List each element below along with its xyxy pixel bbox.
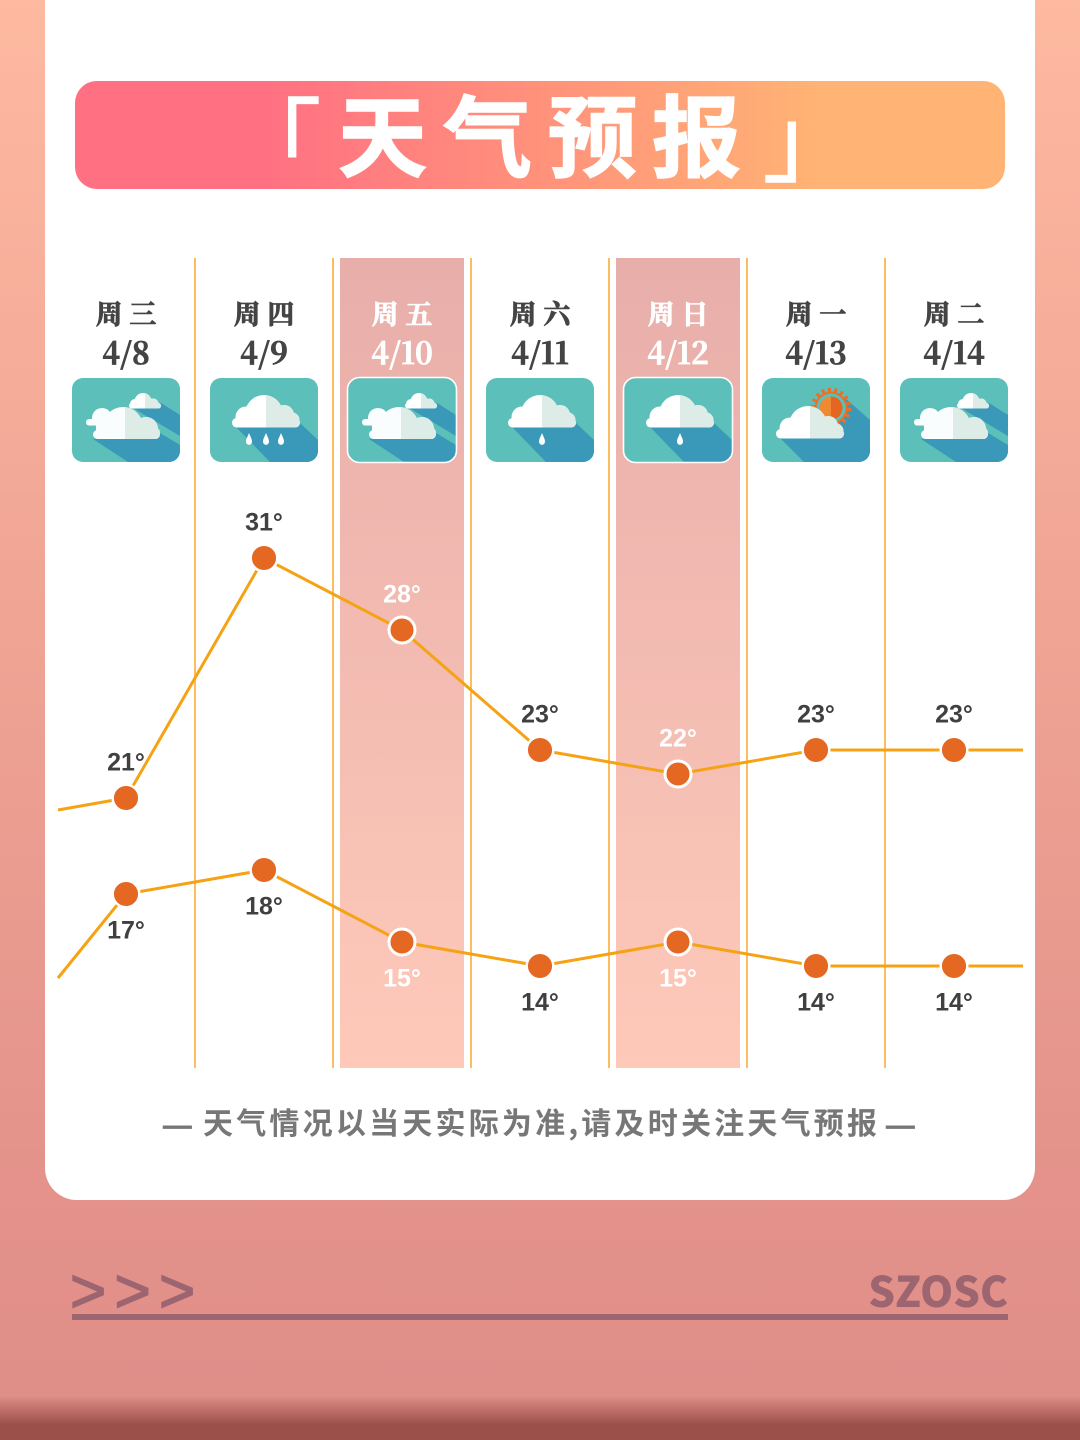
high temperature labels — [107, 508, 973, 776]
high temperature labels: 21° — [107, 748, 145, 776]
day: Mon 4/13: 4/13 — [785, 329, 847, 373]
highlighted column: Sunday — [616, 258, 740, 1068]
title closing bracket: 」 — [763, 68, 855, 201]
icon: sun and cloud, Mon — [762, 378, 870, 462]
high temperature line — [58, 545, 1023, 811]
day: Fri 4/10 — [371, 293, 433, 373]
low temperature labels: 14° — [521, 988, 559, 1016]
footnote: 天气情况以当天实际为准,请及时关注天气预报 — [203, 1099, 877, 1143]
low temperature labels: 14° — [797, 988, 835, 1016]
icon: cloudy, Wed — [72, 378, 180, 462]
icon: cloudy, Tue — [900, 378, 1008, 462]
low temperature labels: 15° — [383, 964, 421, 992]
title opening bracket: 「 — [229, 69, 321, 202]
high temperature labels: 23° — [797, 700, 835, 728]
day: Tue 4/14: 周 二 — [924, 293, 984, 332]
high temperature labels: 23° — [935, 700, 973, 728]
day: Sun 4/12: 4/12 — [647, 329, 709, 373]
day: Sat 4/11 — [510, 293, 572, 373]
footer rule — [72, 1314, 1008, 1320]
low temperature line — [58, 857, 1023, 979]
icon: rain, Thu — [210, 378, 318, 462]
day: Fri 4/10: 周 五 — [372, 293, 432, 332]
day: Wed 4/8 — [96, 293, 156, 373]
day: Tue 4/14 — [923, 293, 985, 373]
day: Mon 4/13: 周 一 — [786, 293, 846, 332]
footer brand: SZOSC — [868, 1259, 1008, 1320]
title text: 天气预报 — [338, 67, 741, 196]
day: Thu 4/9: 周 四 — [234, 293, 294, 332]
high temperature labels: 22° — [659, 724, 697, 752]
icon: light rain, Sun — [624, 378, 732, 462]
title banner — [75, 67, 1005, 202]
column dividers — [195, 258, 885, 1068]
high temperature markers — [113, 545, 967, 811]
low temperature labels: 18° — [245, 892, 283, 920]
day: Sun 4/12: 周 日 — [648, 293, 708, 332]
high temperature labels: 31° — [245, 508, 283, 536]
icon: cloudy, Fri — [348, 378, 456, 462]
low temperature labels: 17° — [107, 916, 145, 944]
low temperature labels: 15° — [659, 964, 697, 992]
bottom shadow band — [0, 1396, 1080, 1440]
day: Sat 4/11: 4/11 — [511, 329, 569, 373]
icon: light rain, Sat — [486, 378, 594, 462]
day: Tue 4/14: 4/14 — [923, 329, 985, 373]
day: Wed 4/8: 周 三 — [96, 293, 156, 332]
footnote: — — [161, 1096, 194, 1148]
low temperature labels — [107, 892, 973, 1016]
day: Mon 4/13 — [785, 293, 847, 373]
day headers — [96, 293, 985, 373]
day: Sun 4/12 — [647, 293, 709, 373]
footnote: — — [884, 1096, 917, 1148]
highlighted column: Friday — [340, 258, 464, 1068]
footer arrows: >>> — [70, 1257, 195, 1326]
day: Wed 4/8: 4/8 — [102, 329, 150, 373]
day: Fri 4/10: 4/10 — [371, 329, 433, 373]
high temperature labels: 23° — [521, 700, 559, 728]
low temperature markers — [113, 857, 967, 979]
day: Thu 4/9: 4/9 — [240, 329, 288, 373]
high temperature labels: 28° — [383, 580, 421, 608]
low temperature labels: 14° — [935, 988, 973, 1016]
day: Sat 4/11: 周 六 — [510, 293, 572, 332]
day: Thu 4/9 — [234, 293, 294, 373]
white card panel — [45, 0, 1035, 1200]
